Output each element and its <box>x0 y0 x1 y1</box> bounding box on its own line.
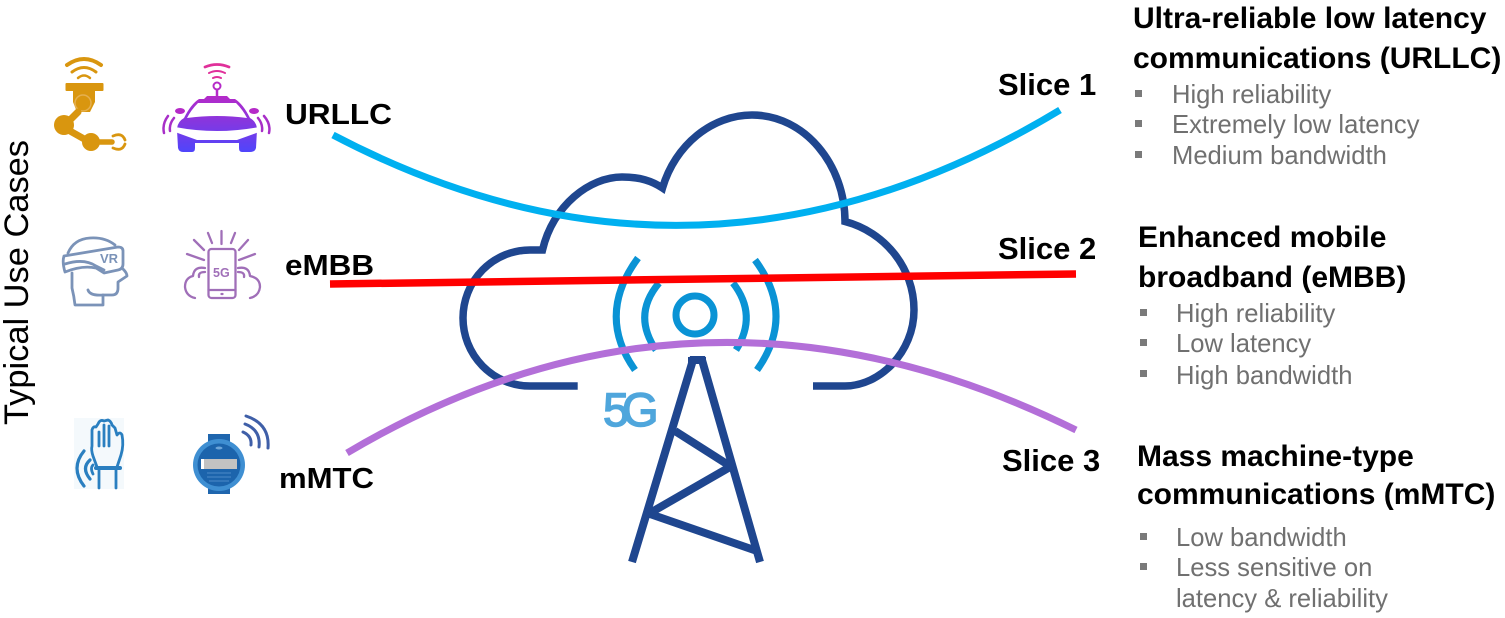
slice label: Slice 2: Slice 2 <box>998 231 1096 266</box>
use case label: eMBB: eMBB <box>285 250 374 282</box>
heading: URLLC: communications (URLLC) <box>1133 42 1501 75</box>
heading: mMTC: communications (mMTC) <box>1137 478 1495 511</box>
icon: 5G smartphone <box>185 231 260 298</box>
heading: eMBB: Enhanced mobile <box>1138 221 1386 254</box>
bullets: URLLC: Extremely low latency <box>1172 111 1420 139</box>
5G logo text: 5G <box>603 383 659 436</box>
icon: smart meter <box>193 416 268 494</box>
slice 3 curve <box>347 342 1076 453</box>
panel: eMBB description <box>1138 221 1406 390</box>
bullets: mMTC: latency & reliability <box>1176 585 1388 613</box>
icon: robot arm <box>54 59 125 151</box>
heading: mMTC: Mass machine-type <box>1137 440 1414 473</box>
icon: VR headset <box>63 238 127 305</box>
slice 1 curve <box>333 110 1060 225</box>
icon: cell tower <box>632 360 760 562</box>
use case label: URLLC: URLLC <box>285 99 392 131</box>
panel: mMTC description <box>1137 440 1495 613</box>
bullets: URLLC: High reliability <box>1172 81 1332 109</box>
icon: 5G signal waves and transmitter <box>616 258 776 370</box>
bullets: mMTC: Less sensitive on <box>1176 554 1372 582</box>
slice 2 line <box>330 274 1076 284</box>
icon: 5G smartphone: 5G <box>213 266 230 280</box>
bullets: URLLC: Medium bandwidth <box>1172 142 1387 170</box>
bullets: eMBB: High reliability <box>1176 300 1336 328</box>
bullets: eMBB: High bandwidth <box>1176 362 1352 390</box>
bullets: eMBB <box>1140 300 1352 390</box>
heading: URLLC: Ultra-reliable low latency <box>1133 2 1487 35</box>
icon: VR headset: VR <box>100 251 119 266</box>
slice label: Slice 3: Slice 3 <box>1002 443 1100 478</box>
panel: URLLC description <box>1133 2 1501 170</box>
bullets: eMBB: Low latency <box>1176 330 1311 358</box>
bullets: URLLC <box>1135 81 1420 170</box>
bullets: mMTC: Low bandwidth <box>1176 524 1347 552</box>
use case label: mMTC: mMTC <box>279 463 374 495</box>
slice label: Slice 1: Slice 1 <box>998 67 1096 102</box>
icon: connected car <box>164 64 269 152</box>
icon: hand with wristband <box>74 418 124 489</box>
heading: eMBB: broadband (eMBB) <box>1138 261 1406 294</box>
bullets: mMTC <box>1140 524 1388 613</box>
icon: cloud outline <box>463 115 914 386</box>
